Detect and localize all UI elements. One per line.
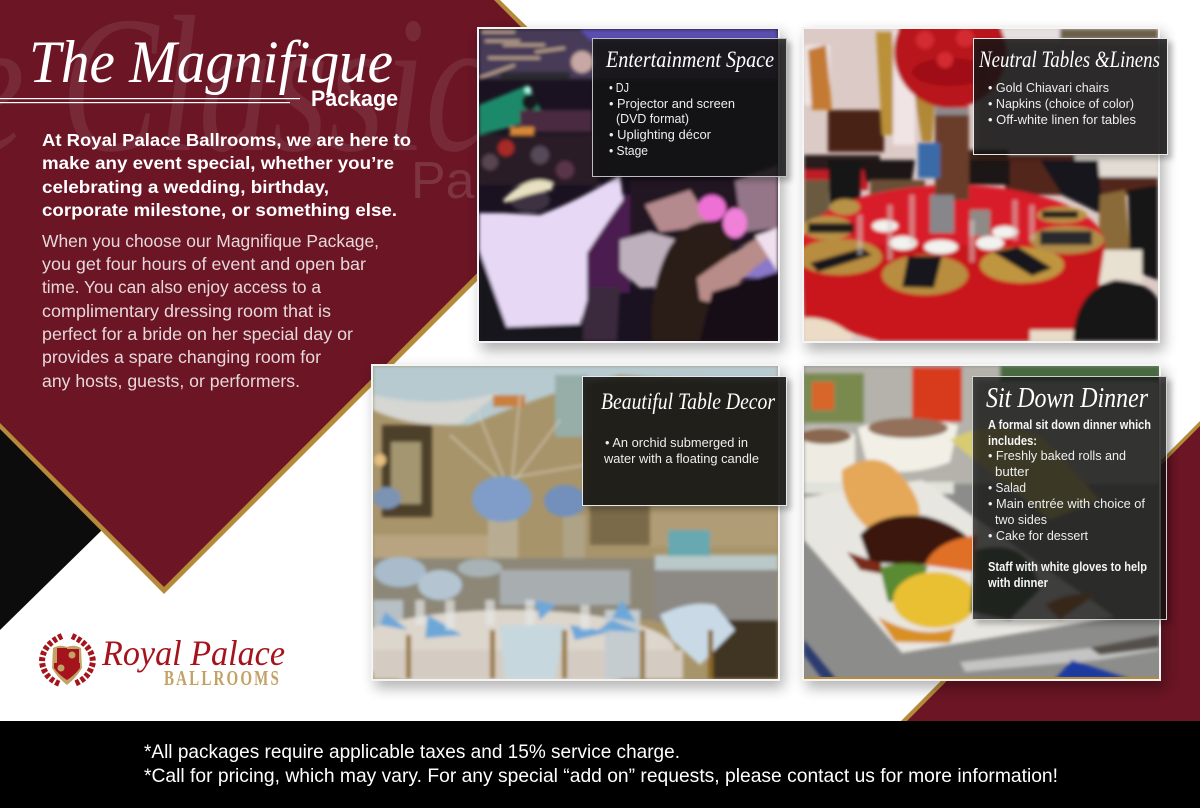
callout: neutral tables: • Napkins (choice of color) [988,97,1134,111]
callout: entertainment space [592,38,791,181]
callout: table decor: • An orchid submerged in [605,436,748,450]
intro text: regular: complimentary dressing room that is [42,301,331,321]
intro text: regular: When you choose our Magnifique Package, [42,231,379,251]
callout: sit down dinner: with dinner [987,576,1048,590]
logo: Royal Palace Ballrooms: BALLROOMS [164,666,281,690]
callout: sit down dinner: • Salad [988,481,1026,495]
footer bar [0,721,1200,808]
logo: Royal Palace Ballrooms [42,633,285,690]
callout: sit down dinner: • Main entrée with choice of [988,497,1146,511]
callout: table decor [582,376,791,510]
logo: Royal Palace Ballrooms: Royal Palace [101,633,285,673]
intro text: bold [42,130,411,220]
photo: dance floor [479,29,778,341]
callout: entertainment space: • Stage [609,144,648,158]
callout: sit down dinner: • Cake for dessert [988,529,1089,543]
panel: neutral tables and linens [798,0,1172,351]
callout: sit down dinner: butter [995,465,1029,479]
photo: blue ballroom [345,366,778,690]
title: Package [311,86,398,111]
footer bar: *All packages require applicable taxes and 15% service charge. [144,741,680,763]
intro text: regular: you get four hours of event and open bar [42,254,366,274]
panel: sit down dinner [799,364,1171,688]
callout: sit down dinner: • Freshly baked rolls and [988,449,1126,463]
callout: sit down dinner [972,376,1171,624]
black triangle accent [0,424,102,630]
callout: sit down dinner: includes: [988,434,1037,448]
callout: sit down dinner: A formal sit down dinner which [988,418,1151,432]
callout: sit down dinner: Sit Down Dinner [986,382,1149,414]
intro text: regular: any hosts, guests, or performers. [42,371,300,391]
callout: entertainment space: • DJ [609,81,629,95]
callout: neutral tables: Neutral Tables &Linens [978,47,1160,72]
panel: entertainment space [477,27,791,351]
photo: red table setting [804,29,1158,341]
callout: neutral tables [974,38,1172,159]
intro text: regular: provides a spare changing room for [42,347,321,367]
callout: sit down dinner: two sides [995,513,1047,527]
intro text: regular: perfect for a bride on her special day or [42,324,353,344]
footer bar: *Call for pricing, which may vary. For any special “add on” requests, please contact us for more information! [144,765,1058,787]
intro text: bold: At Royal Palace Ballrooms, we are here to [42,130,411,150]
intro text: bold: celebrating a wedding, birthday, [42,177,329,197]
intro text: bold: corporate milestone, or something else. [42,200,397,220]
callout: entertainment space: • Uplighting décor [609,128,711,142]
title: The Magnifique [29,29,393,95]
photo: plated dinner [799,366,1160,679]
callout: neutral tables: • Gold Chiavari chairs [988,81,1109,95]
bottom-right maroon corner [901,421,1200,721]
callout: entertainment space: (DVD format) [616,112,689,126]
callout: entertainment space: • Projector and screen [609,97,735,111]
callout: table decor: Beautiful Table Decor [601,389,776,414]
intro text: regular [42,231,379,391]
intro text: regular: time. You can also enjoy access to a [42,277,321,297]
intro text: bold: make any event special, whether you’re [42,153,394,173]
callout: neutral tables: • Off-white linen for tables [988,113,1136,127]
maroon diamond panel [0,0,630,594]
panel: beautiful table decor [345,364,791,690]
callout: table decor: water with a floating candle [603,452,759,466]
icon: laurel wreath crest [42,636,93,685]
callout: sit down dinner: Staff with white gloves to help [988,560,1147,574]
callout: entertainment space: Entertainment Space [605,47,774,72]
watermark: The Classic Package: Package [411,152,613,210]
